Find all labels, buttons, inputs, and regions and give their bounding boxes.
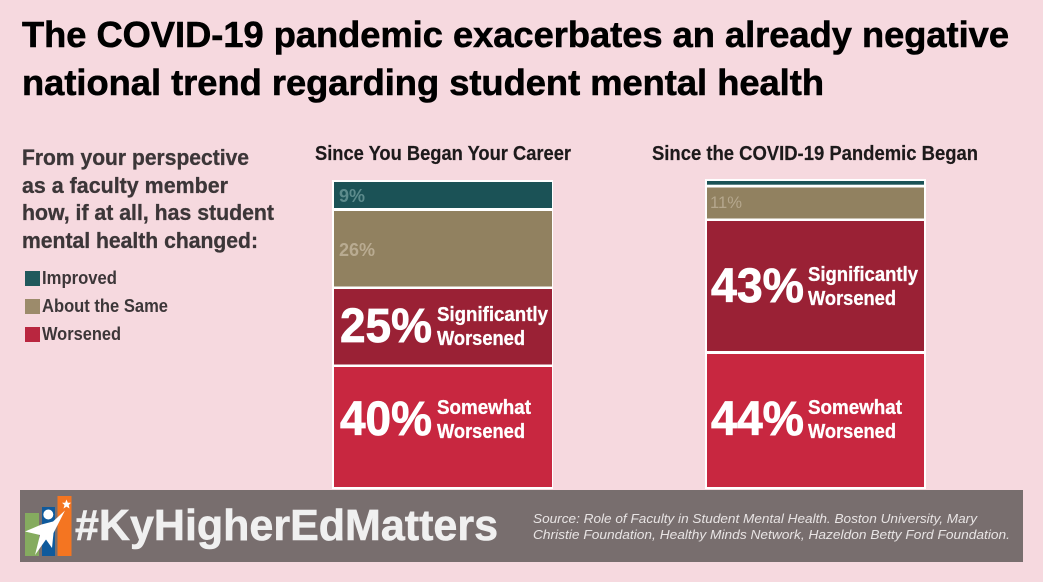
segment: somewhat worsened 44% — [707, 354, 924, 487]
segment: somewhat worsened 40% — [334, 367, 552, 487]
left chart heading: Since You Began Your Career — [315, 143, 571, 165]
segment: significantly worsened 43% — [707, 221, 924, 351]
survey question: how, if at all, has student — [22, 200, 274, 225]
segment: somewhat worsened 44%: Somewhat — [808, 397, 902, 419]
icon: logo — [25, 496, 72, 556]
survey question: mental health changed: — [22, 228, 258, 253]
source note: Christie Foundation, Healthy Minds Network, Hazeldon Betty Ford Foundation. — [533, 527, 1010, 542]
legend: Improved — [42, 268, 117, 288]
survey question: as a faculty member — [22, 173, 228, 198]
left chart: since career began — [315, 143, 571, 489]
segment: about the same 26%: 26% — [339, 240, 375, 260]
segment: somewhat worsened 40%: 40% — [340, 393, 432, 446]
legend: About the Same — [42, 296, 168, 316]
segment: significantly worsened 25%: Worsened — [437, 328, 525, 350]
segment: somewhat worsened 44%: Worsened — [808, 421, 896, 443]
segment: improved 9%: 9% — [339, 186, 365, 206]
hashtag: #KyHigherEdMatters — [75, 501, 498, 550]
right chart heading: Since the COVID-19 Pandemic Began — [652, 143, 978, 165]
survey question — [22, 145, 274, 253]
segment: somewhat worsened 40%: Somewhat — [437, 397, 531, 419]
segment: significantly worsened 25%: Significantly — [437, 304, 549, 326]
source note: Source: Role of Faculty in Student Mental Health. Boston University, Mary — [533, 511, 979, 526]
segment: significantly worsened 25%: 25% — [340, 300, 432, 353]
right chart: since pandemic began — [652, 143, 978, 489]
segment: about the same 11% — [707, 188, 924, 218]
survey question: From your perspective — [22, 145, 249, 170]
segment: somewhat worsened 44%: 44% — [711, 393, 804, 446]
segment: significantly worsened 43%: 43% — [711, 260, 804, 313]
segment: improved 9% — [334, 182, 552, 208]
segment: improved — [707, 181, 924, 185]
legend: Worsened — [42, 324, 121, 344]
segment: significantly worsened 43%: Significantly — [808, 264, 919, 286]
title — [22, 14, 1009, 103]
title: The COVID-19 pandemic exacerbates an already negative — [22, 14, 1009, 55]
segment: significantly worsened 25% — [334, 289, 552, 364]
segment: about the same 11%: 11% — [710, 193, 742, 212]
segment: significantly worsened 43%: Worsened — [808, 288, 896, 310]
segment: about the same 26% — [334, 211, 552, 286]
title: national trend regarding student mental health — [22, 62, 824, 103]
footer band — [20, 490, 1023, 562]
segment: somewhat worsened 40%: Worsened — [437, 421, 525, 443]
source note — [533, 511, 1010, 542]
legend — [25, 268, 168, 344]
